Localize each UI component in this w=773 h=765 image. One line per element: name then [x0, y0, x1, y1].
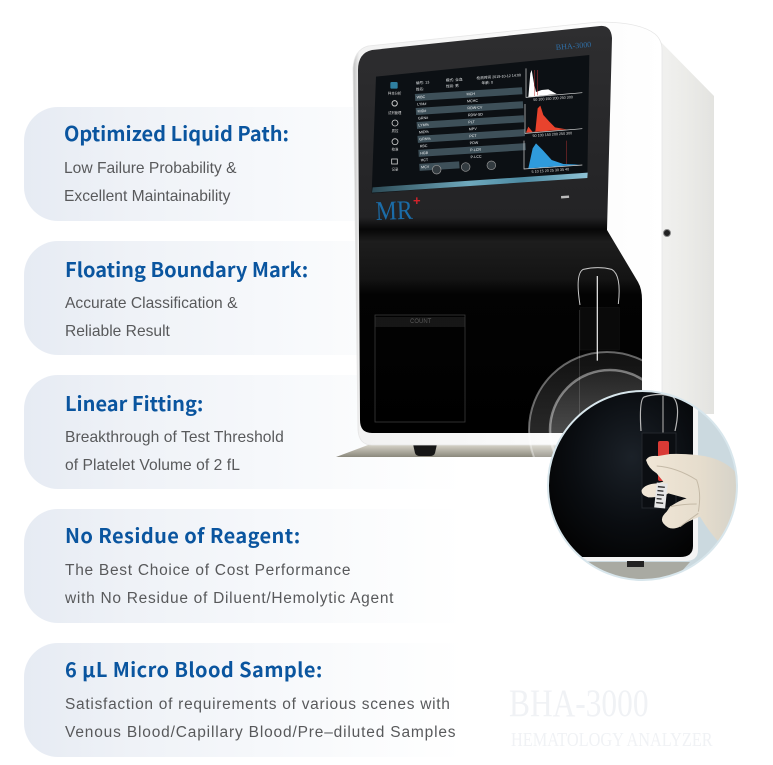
results table: MCH [467, 92, 475, 96]
results table: LYM# [417, 102, 428, 107]
results table: MID# [417, 109, 427, 114]
screen background [372, 55, 589, 193]
results table: MCV [421, 165, 430, 169]
foot [627, 561, 644, 567]
watermark: product name [509, 682, 713, 751]
text: boundary mark description [65, 295, 238, 340]
sidebar icons: 试剂管理 [388, 110, 402, 115]
text: liquid path description: Low Failure Probability & [64, 160, 236, 177]
text: boundary mark description: Reliable Result [65, 323, 170, 340]
panel: floating boundary mark [24, 241, 464, 355]
text: micro blood sample description: Satisfaction of requirements of various scenes with [65, 696, 451, 713]
panel: optimized liquid path [24, 107, 464, 221]
results table: HCT [421, 158, 429, 162]
RBC histogram: 50 100 150 200 250 300 [532, 131, 572, 138]
screen bottom bar [372, 173, 588, 193]
heading: no residue of reagent: No Residue of Reagent: [65, 520, 301, 549]
logo: MR: + [413, 193, 421, 208]
panel: linear fitting [24, 375, 464, 489]
results table: RBC [420, 144, 428, 148]
results table: PCT [469, 134, 477, 138]
sidebar icons: 样本分析 [388, 91, 402, 96]
results table: HGB [420, 151, 429, 155]
USB port [561, 195, 569, 198]
text: reagent description [65, 562, 394, 607]
WBC histogram [526, 68, 582, 102]
text: micro blood sample description: Venous Blood/Capillary Blood/Pre–diluted Samples [65, 724, 456, 741]
slot [640, 394, 678, 431]
heading: micro blood sample: 6 µL Micro Blood Sample: [65, 654, 323, 683]
PLT histogram [524, 141, 582, 174]
results header: 年龄: 0 [481, 80, 493, 85]
results table: MCHC [467, 99, 478, 103]
results header: 姓名: [416, 86, 424, 92]
results table: P-LCC [470, 155, 482, 159]
magnified lens: loading a blood sample [547, 390, 738, 581]
sample discs [528, 351, 642, 457]
RBC histogram [525, 104, 582, 138]
text: linear fitting description [65, 428, 284, 474]
touchscreen [372, 55, 589, 193]
sidebar icons: 记录 [392, 167, 399, 172]
panel: no residue of reagent [24, 509, 464, 623]
lens background [548, 390, 738, 580]
watermark: product name: HEMATOLOGY ANALYZER [511, 729, 713, 751]
front housing [353, 22, 662, 445]
black panel [540, 385, 693, 557]
logo: MR: MR [375, 195, 413, 226]
sample slot [578, 268, 619, 437]
results table: WBC [417, 95, 426, 100]
text: liquid path description: Excellent Maintainability [64, 188, 230, 205]
floor shade [589, 562, 690, 579]
results table: P-LCR [470, 148, 482, 152]
tube barcode label [654, 482, 668, 509]
lens contents [549, 392, 736, 579]
results table: MPV [469, 127, 477, 131]
side panel [655, 36, 714, 414]
text: linear fitting description: of Platelet Volume of 2 fL [65, 456, 240, 474]
results header: 模式: 全血 [446, 76, 463, 83]
results table: MID% [419, 130, 430, 134]
results header: 性别: 男 [446, 83, 459, 89]
white frame [582, 407, 698, 561]
results header: 检测时间 2019-10-12 14:00 [476, 72, 521, 80]
text: reagent description: with No Residue of Diluent/Hemolytic Agent [65, 590, 394, 607]
text: micro blood sample description [65, 696, 456, 741]
black front panel [358, 26, 642, 433]
text: boundary mark description: Accurate Classification & [65, 295, 237, 312]
results table: PDW [470, 141, 479, 145]
gloved hand [642, 454, 738, 543]
watermark: product name: BHA-3000 [509, 682, 649, 725]
heading: linear fitting: Linear Fitting: [65, 388, 203, 417]
floor shadow [336, 445, 640, 457]
heading: floating boundary mark: Floating Boundary Mark: [65, 254, 308, 283]
results table: PLT [468, 120, 476, 124]
results table: LYM% [418, 123, 430, 127]
screen buttons [432, 161, 496, 174]
results header: 编号: 13 [416, 79, 429, 85]
WBC histogram: 50 100 150 200 250 300 [533, 95, 573, 102]
text: liquid path description [64, 160, 236, 205]
results table: GRN# [418, 116, 429, 121]
sidebar icons: 校准 [392, 147, 399, 152]
panel: micro blood sample [24, 643, 464, 757]
text: reagent description: The Best Choice of Cost Performance [65, 562, 351, 579]
results header [416, 72, 521, 92]
blood tube [658, 441, 669, 481]
results table [415, 87, 527, 171]
side button [664, 230, 670, 236]
lens border [548, 391, 737, 580]
cover plate [375, 315, 465, 422]
sidebar icons [388, 82, 402, 172]
PLT histogram: 5 10 15 20 25 30 35 40 [531, 167, 569, 174]
model label: BHA-3000 [555, 40, 592, 52]
results table: RDW-CV [467, 105, 483, 110]
device foot [413, 444, 437, 456]
results table: RDW-SD [468, 112, 483, 117]
sidebar icons: 质控 [392, 128, 399, 133]
results table: GRN% [419, 137, 432, 141]
text: linear fitting description: Breakthrough of Test Threshold [65, 428, 284, 446]
heading: optimized liquid path: Optimized Liquid Path: [64, 118, 289, 147]
analyzer device [336, 22, 714, 457]
cover plate: COUNT [410, 319, 432, 325]
